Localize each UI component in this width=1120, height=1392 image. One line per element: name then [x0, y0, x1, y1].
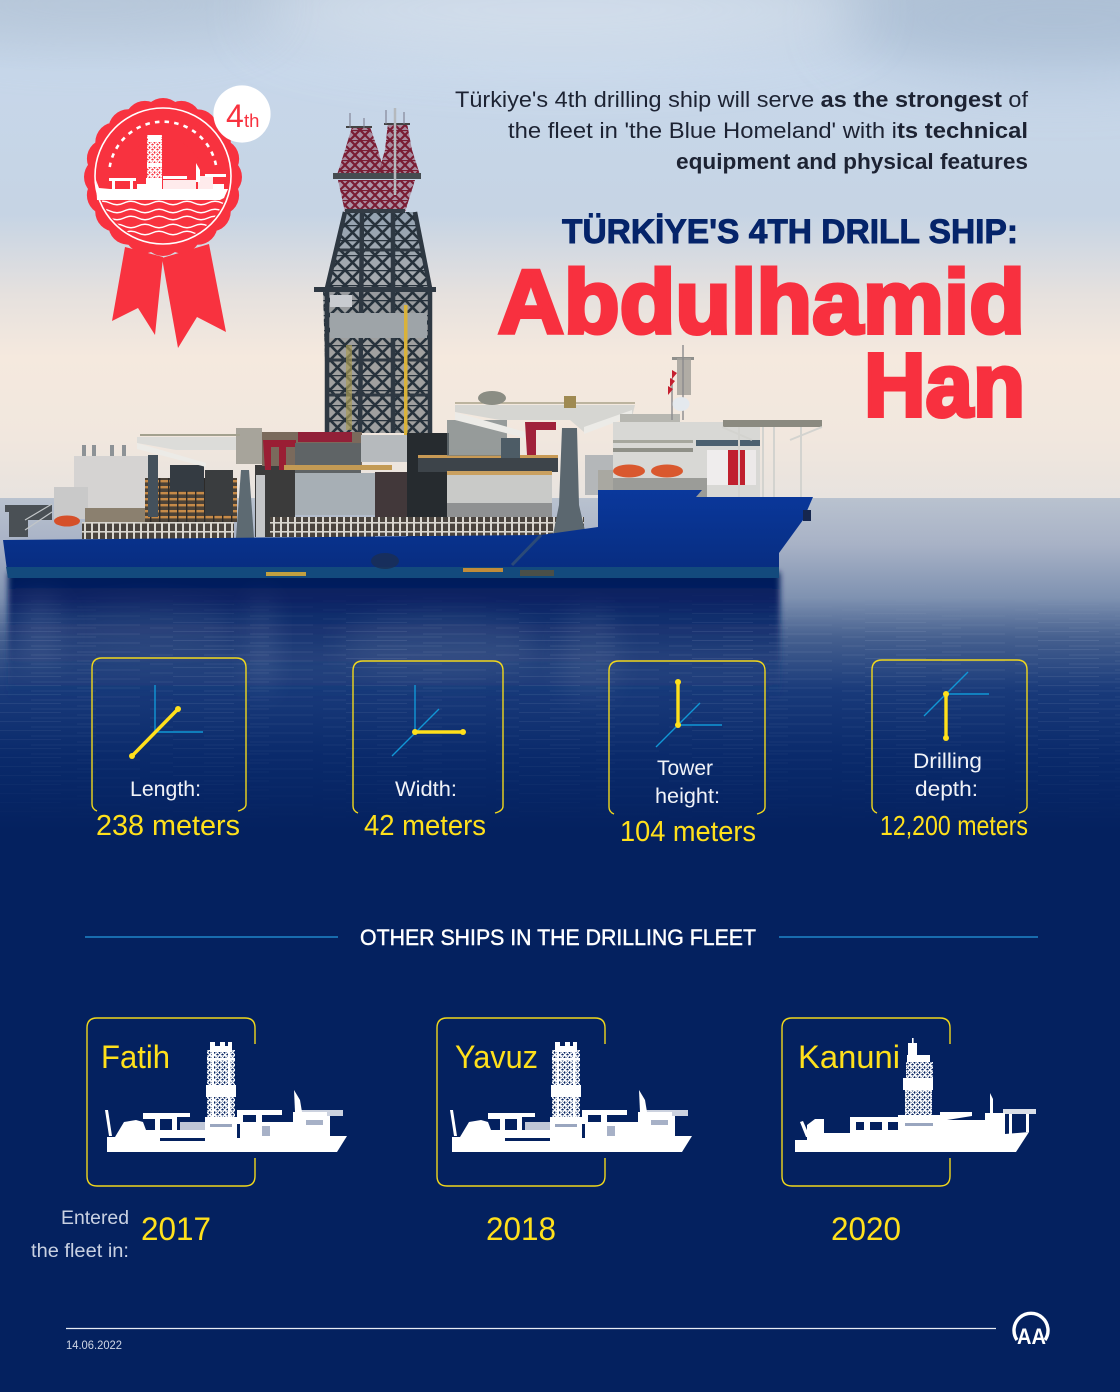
panel: drilling depth: 12,200 meters	[880, 810, 1028, 841]
icon: width axes	[392, 685, 466, 756]
logo: AA	[1014, 1313, 1048, 1349]
panel: tower height: height:	[655, 785, 720, 808]
blue hull	[3, 490, 813, 578]
icon: Kanuni ship	[795, 1038, 1036, 1152]
years: 2020	[831, 1211, 901, 1247]
panel: drilling depth	[872, 660, 1028, 841]
panel: tower height: Tower	[657, 757, 713, 780]
icon: Yavuz ship	[450, 1042, 692, 1152]
panel: width: 42 meters	[364, 810, 486, 842]
panel: width	[353, 661, 503, 842]
panel: drilling depth: Drilling	[913, 750, 982, 773]
badge: 4th: th	[244, 110, 259, 131]
derrick tower	[314, 108, 436, 435]
years: 2018	[486, 1211, 556, 1247]
badge: 4th: 4	[226, 98, 244, 134]
text: entered the fleet in	[31, 1208, 129, 1262]
panel: tower height: 104 meters	[620, 816, 756, 848]
intro text: equipment and physical features	[676, 149, 1028, 174]
icon: height axes	[656, 679, 722, 747]
icon: waves on seal	[96, 201, 236, 235]
panel: width: Width:	[395, 778, 457, 801]
ribbon tails	[112, 244, 226, 348]
section heading: other ships: OTHER SHIPS IN THE DRILLING FLEET	[360, 925, 756, 950]
red rosette badge	[95, 85, 271, 348]
text: entered the fleet in: Entered	[61, 1208, 129, 1229]
text: entered the fleet in: the fleet in:	[31, 1241, 129, 1262]
intro text: Türkiye's 4th drilling ship will serve as the strongest of	[455, 87, 1029, 112]
title: Abdulhamid Han	[498, 253, 1025, 436]
years: 2017	[141, 1211, 211, 1247]
panel: Kanuni: Kanuni	[798, 1039, 900, 1075]
years	[141, 1211, 901, 1247]
superstructure	[5, 391, 635, 539]
icon: length axes	[129, 685, 203, 759]
panel: Fatih: Fatih	[101, 1039, 170, 1075]
footer line	[66, 1328, 996, 1330]
panel: drilling depth: depth:	[915, 778, 978, 801]
panel: Yavuz: Yavuz	[455, 1039, 538, 1075]
panel: Kanuni	[782, 1018, 1036, 1186]
icon: depth axes	[924, 672, 989, 741]
badge: 4th	[213, 85, 271, 143]
logo: AA: AA	[1017, 1324, 1046, 1349]
bridge and accommodation block	[613, 345, 822, 497]
panel: length: Length:	[130, 778, 201, 801]
panel: length	[92, 658, 246, 842]
panel: Fatih	[87, 1018, 347, 1186]
date: 14.06.2022	[66, 1340, 122, 1352]
heading: Türkiye's 4th drill ship: TÜRKİYE'S 4TH DRILL SHIP:	[562, 213, 1018, 251]
panel: tower height	[609, 661, 765, 848]
icon: Fatih ship	[105, 1042, 347, 1152]
icon: white ship on seal	[96, 135, 228, 200]
panel: Yavuz	[437, 1018, 692, 1186]
background: sky and sea photo	[0, 0, 1120, 796]
intro text: the fleet in 'the Blue Homeland' with i ts technical	[508, 118, 1028, 143]
title: Abdulhamid Han: Han	[864, 336, 1025, 436]
title: Abdulhamid Han: Abdulhamid	[498, 253, 1025, 353]
photo: drill ship Abdulhamid Han	[3, 108, 822, 578]
panel: length: 238 meters	[96, 810, 240, 842]
intro text	[455, 87, 1029, 174]
scalloped seal	[95, 108, 231, 244]
